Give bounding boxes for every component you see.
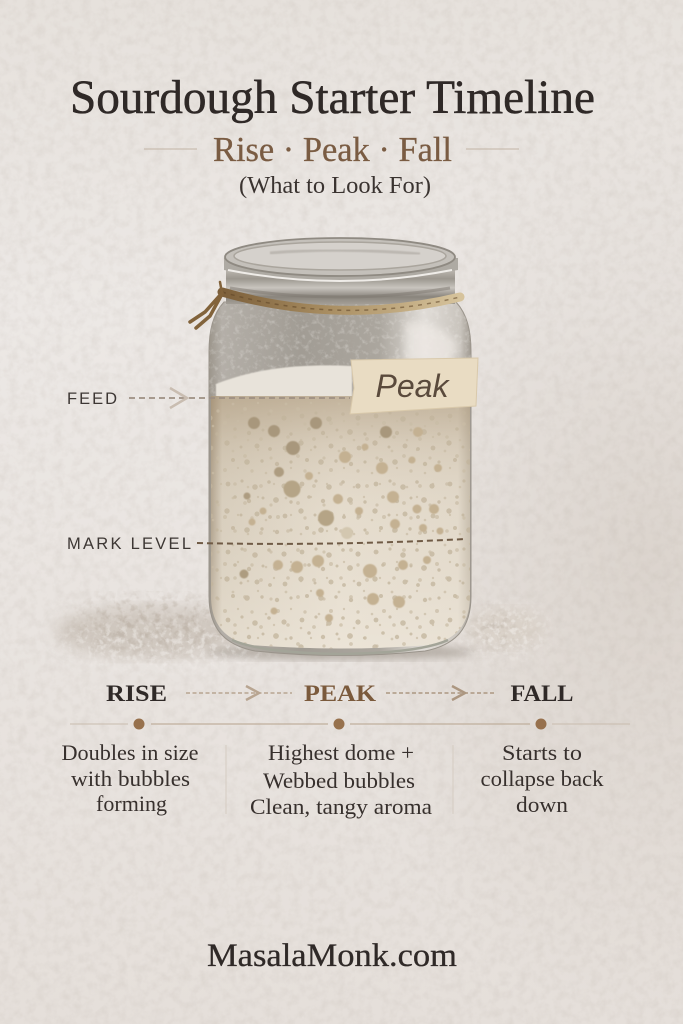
jar rim (224, 238, 458, 297)
feed dashed arrow (129, 388, 350, 408)
twine (190, 282, 460, 328)
peak heading: PEAK (304, 681, 376, 706)
column: peak description: Webbed bubbles (263, 768, 415, 793)
large bubbles (240, 417, 444, 622)
column: fall description: collapse back (480, 766, 604, 791)
timeline headings (106, 681, 574, 706)
column: rise description: with bubbles (71, 766, 190, 791)
column divider 2 (452, 745, 454, 814)
rise heading: RISE (106, 681, 167, 706)
subtitle: rise peak fall: Rise · Peak · Fall (213, 130, 452, 169)
peak tag (350, 358, 478, 414)
column: peak description: Clean, tangy aroma (250, 794, 432, 819)
peak tag text: Peak (376, 368, 451, 404)
column: fall description: down (516, 792, 568, 817)
column divider 1 (225, 745, 227, 814)
subheading: what to look for: (What to Look For) (239, 173, 431, 199)
mark level label: MARK LEVEL (67, 535, 191, 553)
column: rise description: Doubles in size (62, 740, 198, 765)
flour spill around jar (55, 601, 549, 664)
arrow: peak to fall (386, 686, 496, 700)
jar glass body (209, 302, 471, 656)
fall heading: FALL (510, 681, 574, 706)
title: Sourdough Starter Timeline (70, 71, 595, 124)
jar base lip (232, 640, 448, 654)
column: rise description: forming (96, 791, 167, 816)
column: fall description: Starts to (502, 740, 582, 765)
mark level dashed line (197, 539, 466, 544)
column: peak description (250, 740, 432, 819)
mark level marker (67, 535, 466, 553)
flour film on glass (209, 302, 471, 400)
column: rise description (62, 740, 198, 816)
feed marker (67, 388, 350, 408)
column: fall description (480, 740, 604, 817)
jar neck (226, 268, 455, 304)
starter body (209, 396, 471, 658)
starter dome foam (216, 365, 352, 400)
feed label: FEED (67, 390, 117, 408)
column: peak description: Highest dome + (268, 740, 414, 765)
jar (190, 238, 471, 658)
arrow: rise to peak (186, 686, 292, 700)
footer website: MasalaMonk.com (207, 938, 457, 974)
timeline line with dots (70, 718, 630, 730)
